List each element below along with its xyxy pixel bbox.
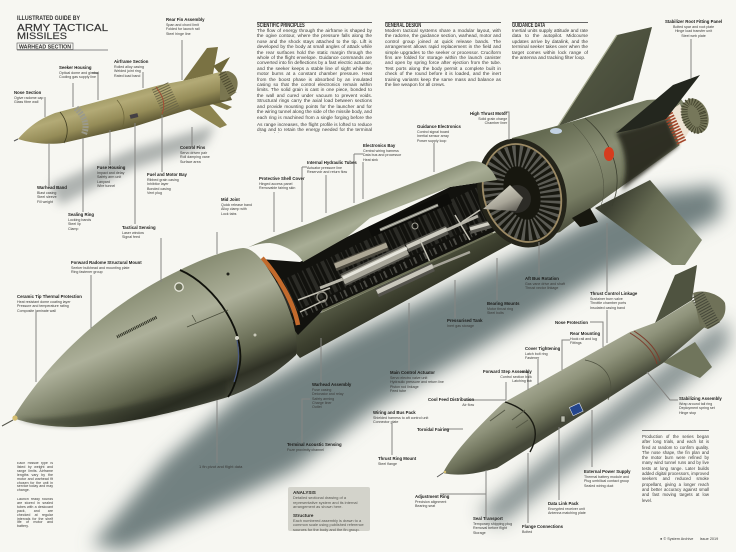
footer credit: ● © System Archive Issue 2019: [660, 537, 718, 541]
callout: adjust: Adjustment Ring: [415, 494, 449, 499]
nozzle cone: [483, 185, 523, 211]
callout: adjust: Precision alignment: [415, 500, 446, 504]
callout: stabilizing: [679, 397, 722, 415]
callout: seal: Removal before flight: [473, 526, 507, 530]
callout: bottom centre: 1 fin pivot and flight data: [199, 464, 242, 469]
callout: control: [180, 145, 210, 164]
callout: warhead: [37, 185, 67, 204]
callout: fins: Steel hinge line: [166, 32, 191, 36]
callout: nose: Ogive radome cap: [14, 96, 43, 100]
heading: column one: [257, 14, 372, 23]
callout: tail fins: Stabilizer Root Fitting Panel: [665, 19, 722, 24]
callout: sensing lower: Terminal Acoustic Sensing: [287, 442, 342, 447]
callout: band: Lanyard: [97, 180, 110, 184]
callout: fastening: Bolted: [522, 530, 532, 534]
callout: tail fins: [665, 19, 722, 38]
callout: turbine: Power supply loop: [417, 139, 446, 143]
callout: control: Surface area: [180, 160, 201, 164]
callout: sustainer: Sustainer burn valve: [590, 297, 623, 301]
callout: forward: Forward Step Assembly: [483, 369, 532, 374]
callout: ring bottom: [378, 456, 416, 466]
callout: ring: Clamp: [68, 227, 78, 231]
callout: bus: Shielded harness to aft control unit: [373, 416, 428, 420]
callout: fastening: [522, 525, 563, 534]
callout: lower centre: Inert gas storage: [447, 324, 474, 328]
callout: cool: Cool Feed Distribution: [428, 397, 474, 402]
interior machinery: [280, 195, 500, 322]
callout: lower body: Steel bolts: [487, 311, 504, 315]
callout: left upper: Seeker bulkhead and mounting plate: [71, 266, 130, 270]
callout: collar: Quick release band: [221, 203, 252, 207]
large cutaway missile: [2, 27, 713, 427]
callout: sensing lower: [287, 442, 342, 452]
title block: ARMY TACTICAL: [17, 23, 109, 34]
callout: cover: Fastener: [525, 356, 539, 360]
callout: reservoir: Plug umbilical contact group: [584, 479, 629, 483]
callout: collar: Mid Joint: [221, 197, 240, 202]
collar section: [180, 248, 297, 397]
callout: control: Roll damping vane: [180, 155, 210, 159]
callout: ring: Steel lip: [68, 222, 81, 226]
nose markings: [117, 317, 157, 337]
callout: fins: Rear Fin Assembly: [166, 17, 205, 22]
callout: sensing: Tactical Sensing: [122, 225, 156, 230]
callout: control: Servo driven pair: [180, 151, 207, 155]
callout: lower centre: [447, 318, 483, 328]
callout: ribs: Ribbed grain casing: [147, 178, 179, 182]
callout: warhead: Steel sleeve: [37, 195, 57, 199]
callout: bay: Electronics Bay: [363, 143, 395, 148]
callout: thrust: Chamber liner: [485, 121, 507, 125]
callout: band: Fuse Housing: [97, 165, 125, 170]
callout: ring: Sealing Ring: [68, 212, 94, 217]
callout: fairing: Gas vane drive and shaft: [525, 282, 565, 286]
info box: analysis: ANALYSIS: [293, 490, 316, 495]
callout: bus: Connector plate: [373, 420, 398, 424]
callout: rails: Reservoir and return flow: [307, 170, 347, 174]
open interior cavity: [248, 180, 516, 335]
callout: warhead: Blast casing: [37, 191, 56, 195]
callout: thrust: High Thrust Motor: [470, 111, 507, 116]
callout: stabilizing: Stabilizing Assembly: [679, 396, 722, 401]
callout: ring bottom: Thrust Ring Mount: [378, 456, 416, 461]
callout: adjust: [415, 494, 450, 508]
callout: rails: Actuator pressure line: [307, 166, 342, 170]
callout: cool: [428, 397, 474, 407]
info box: analysis: [288, 487, 370, 531]
callout: reservoir: Thermal battery module and: [584, 475, 629, 479]
callout: thrust: Solid grain charge: [478, 117, 507, 121]
nose cone: [13, 270, 240, 427]
callout: forward: Control section bulk: [500, 375, 532, 379]
callout: disc: [548, 502, 586, 516]
callout: control: Control Fins: [180, 145, 205, 150]
callout: seeker: Cooling gas supply line: [59, 75, 96, 79]
callout: ribs: [147, 172, 187, 195]
callout: left lower: Composite laminate wall: [17, 309, 56, 313]
callout: cover: [525, 346, 560, 360]
right dark fin: [616, 75, 700, 133]
text: lower right notes: Production of the series began after long trials, and each lot is fired at random to confirm quality. The nose shape, the fin plan and the motor burn were refined by many wind tunnel runs and by live tests at long range. Later builds added digital processors, improved seekers and reduced smoke propellant, giving a longer reach and better accuracy against small and fast moving targets at low level.: [642, 434, 709, 503]
leader lines: [36, 39, 691, 523]
callout: warhead fuse: Safety arming: [312, 397, 334, 401]
callout: bay: Heat sink: [363, 158, 378, 162]
rear ring with radial structure: [468, 131, 576, 255]
lower fin: [595, 180, 702, 265]
callout: ribs: Vent plug: [147, 191, 162, 195]
callout: turbine: Inertial sensor array: [417, 134, 449, 138]
callout: band: Safety arm unit: [97, 175, 121, 179]
text: lower left notes: [17, 462, 53, 529]
callout: mount: [570, 331, 600, 345]
callout: adjust: Bearing seat: [415, 504, 435, 508]
callout: bus: Wiring and Bus Pack: [373, 410, 416, 415]
callout: reservoir: [584, 470, 631, 488]
callouts: large missile upper: [17, 19, 722, 328]
callout: sensing lower: Fuze proximity channel: [287, 448, 324, 452]
title block: ILLUSTRATED GUIDE BY: [17, 16, 80, 22]
callout: left lower: [17, 294, 82, 313]
callout: sustainer: Thrust Control Linkage: [590, 291, 637, 296]
callout: stabilizing: Hinge stop: [679, 411, 696, 415]
callout: fins: Folded for launch rail: [166, 27, 200, 31]
callout: fins: Span and chord limit: [166, 23, 199, 27]
blue badge: [550, 128, 562, 134]
callout: shell: [259, 176, 305, 190]
callout: warhead: Fill weight: [37, 200, 53, 204]
callouts: lower right missile: [415, 276, 722, 535]
callout: hydraulic: Main Control Actuator: [390, 370, 435, 375]
callout: reservoir: External Power Supply: [584, 469, 631, 474]
callout: warhead fuse: Fuse casing: [312, 388, 331, 392]
small khaki missile, top left: [14, 47, 238, 144]
callout: warhead fuse: [312, 382, 352, 409]
callout: left upper: [71, 260, 142, 274]
title block: [16, 16, 109, 50]
lower body strip: [280, 223, 545, 358]
tail section body: [512, 98, 688, 245]
lower right missile: [437, 265, 725, 477]
callout: turbine: Guidance Electronics: [417, 124, 461, 129]
callout: left upper: Ring fastener group: [71, 270, 103, 274]
callout: seeker: Optical dome and gimbal: [59, 71, 99, 75]
callout: disc: Antenna matching plate: [548, 511, 586, 515]
callout: disc: Encrypted receiver unit: [548, 507, 585, 511]
callout: shell: Protective Shell Cover: [259, 176, 305, 181]
callout: hydraulic: Piston rod linkage: [390, 385, 419, 389]
callout: hydraulic: Feed tube: [390, 389, 406, 393]
callout: shell: Removable fairing skin: [259, 186, 295, 190]
callout: collar: Lock tabs: [221, 212, 236, 216]
callout: lower centre: Pressurised Tank: [447, 318, 483, 323]
callout: thin label: Nose Protection: [555, 320, 588, 325]
text: GUIDANCE DATA: [512, 22, 545, 29]
callout: left upper: Forward Radome Structural Mount: [71, 260, 142, 265]
callout: lower body: [487, 301, 520, 315]
callout: mount: Fittings: [570, 341, 582, 345]
callout: band: [97, 165, 126, 188]
nose tip probe: [2, 420, 13, 426]
callout: sustainer: Insulated casing band: [590, 306, 625, 310]
callout: body: Rolled alloy casing: [114, 65, 144, 69]
callout: fairing: Aft Bus Rotation: [525, 276, 559, 281]
callout: body: Airframe Section: [114, 59, 148, 64]
callout: mount: Rear Mounting: [570, 331, 600, 336]
callout: body: Welded joint ring: [114, 69, 141, 73]
callout: ribs: Inhibitor layer: [147, 182, 169, 186]
callout: stabilizing: Wrap around tail ring: [679, 402, 712, 406]
callout: seal: [473, 517, 512, 535]
info box: analysis: Detailed sectional drawing of a representative system and its internal arrangement as shown here. Each numbered assembly is drawn to a common scale using published reference sources for the body and the fin group.: [293, 495, 364, 532]
callout: bus: [373, 410, 428, 424]
callout: forward: Latching tab: [512, 379, 532, 383]
callout: disc: Data Link Pack: [548, 501, 579, 506]
callout: fairing: [525, 276, 565, 290]
callout: ring bottom: Steel flange: [378, 462, 397, 466]
callout: band: Wire tunnel: [97, 184, 115, 188]
red roundel: [604, 147, 614, 161]
cutaway cover shell: [243, 161, 497, 262]
cast shadows: [50, 125, 730, 550]
callout: ribs: Fuel and Motor Bay: [147, 172, 187, 177]
callout: cool: Air flow: [462, 403, 474, 407]
callout: warhead fuse: Warhead Assembly: [312, 382, 351, 387]
callout: sustainer: Throttle chamber ports: [590, 301, 626, 305]
orange band: [262, 258, 298, 325]
callout: bay: [363, 143, 402, 162]
callout: lower body: Motor thrust ring: [487, 307, 513, 311]
callout: nose: Nose Section: [14, 90, 41, 95]
heading: column three: [512, 14, 588, 23]
info box: analysis: Structure: [293, 512, 313, 518]
title block: MISSILES: [17, 31, 67, 42]
callout: turbine: [417, 124, 461, 143]
callout: seal: Temporary shipping plug: [473, 522, 512, 526]
callout: thrust: [470, 111, 508, 125]
callout: rails: [307, 160, 357, 174]
callout: ring: Locking bands: [68, 218, 91, 222]
callout: nose: Glass fibre wall: [14, 100, 38, 104]
callout: bay: Data bus and processor: [363, 153, 401, 157]
callout: seal: Seal Transport: [473, 516, 503, 521]
callout: tail fins: Hinge load transfer unit: [675, 29, 712, 33]
callout: collar: [221, 197, 252, 216]
text: SCIENTIFIC PRINCIPLES: [257, 22, 305, 29]
callout: sustainer: [590, 291, 638, 310]
callout: fairing: Thrust vector linkage: [525, 286, 558, 290]
text: GENERAL DESIGN: [385, 22, 421, 29]
callout: ribs: Bonded casing: [147, 187, 171, 191]
callout: warhead fuse: Detonator and relay: [312, 392, 344, 396]
callout: nose: [14, 90, 44, 104]
callout: seal: Storage: [473, 531, 486, 535]
callout: shell: Hinged access panel: [259, 182, 292, 186]
callout: hydraulic: [390, 370, 444, 393]
text: column three: Inertial units supply attitude and rate data to the autopilot. Midcourse updates arrive by datalink, and the terminal seeker takes over when the target comes within lock range of the antenna and tracking filter loop.: [512, 28, 588, 60]
callout: turbine: Control signal board: [417, 130, 449, 134]
callout: left lower: Pressure and temperature rating: [17, 304, 69, 308]
callout: sensing: Signal feed: [122, 235, 140, 239]
callout: cover: Cover Tightening: [525, 346, 560, 351]
blue panel: [569, 403, 583, 416]
callout: rails: Internal Hydraulic Tubes: [307, 160, 357, 165]
callout: fins: [166, 17, 205, 36]
callout: band: Impact and delay: [97, 171, 124, 175]
callout: body: Rated load band: [114, 74, 140, 78]
callout: hydraulic: Servo electro valve unit: [390, 376, 427, 380]
text: column two: Modern tactical systems share a modular layout, with the radome, the guidance section, warhead, motor and control group joined at quick release bands. The arrangement allows rapid replacement in the field and simple upgrades to the seeker or processor. Cruciform fins are folded for storage within the launch canister and open by spring force after ejection from the tube. Test ports along the body permit a complete built in check of the round before it is loaded, and the inert training variants keep the same mass and balance as the live weapon for all crews.: [385, 28, 501, 87]
callout: cover: Latch bolt ring: [525, 352, 548, 356]
callout: sensing: Laser window: [122, 231, 144, 235]
callout: tail fins: Bolted spar and root plate: [673, 25, 714, 29]
callout: warhead fuse: Outlet: [312, 405, 322, 409]
callout: collar: Alloy clamp with: [221, 207, 247, 211]
callout: body: [114, 59, 148, 78]
callout: sensing: [122, 225, 156, 239]
rear fin, upper: [558, 27, 652, 126]
callouts: beneath large missile: [287, 370, 444, 466]
callout: reservoir: Sealed wiring duct: [584, 484, 613, 488]
fin bracket: [572, 208, 598, 227]
callout: left lower: Ceramic Tip Thermal Protection: [17, 294, 82, 299]
callout: mount: Hook rail and lug: [570, 337, 597, 341]
callout: seeker: Seeker Housing: [59, 65, 91, 70]
heading: column two: [385, 14, 501, 23]
callout: toroidal: Toroidal Fairing: [417, 427, 449, 432]
callout: forward: [483, 369, 532, 383]
callout: fastening: Flange Connections: [522, 524, 563, 529]
callout: warhead: Warhead Band: [37, 185, 67, 190]
callout: warhead fuse: Charge liner: [312, 401, 332, 405]
engine nozzle: [668, 95, 713, 146]
callout: ring: [68, 212, 94, 231]
callouts: top left missile: [14, 17, 210, 239]
callout: tail fins: Steel web plate: [681, 34, 706, 38]
callout: lower body: Bearing Mounts: [487, 301, 519, 306]
callout: bay: Central wiring harness: [363, 149, 399, 153]
title block: WARHEAD SECTION: [19, 44, 71, 50]
callout: left lower: Heat resistant dome coating layer: [17, 300, 71, 304]
callout: hydraulic: Hydraulic pressure and return line: [390, 380, 444, 384]
callout: stabilizing: Deployment spring set: [679, 406, 715, 410]
callout: seeker: [59, 65, 99, 79]
